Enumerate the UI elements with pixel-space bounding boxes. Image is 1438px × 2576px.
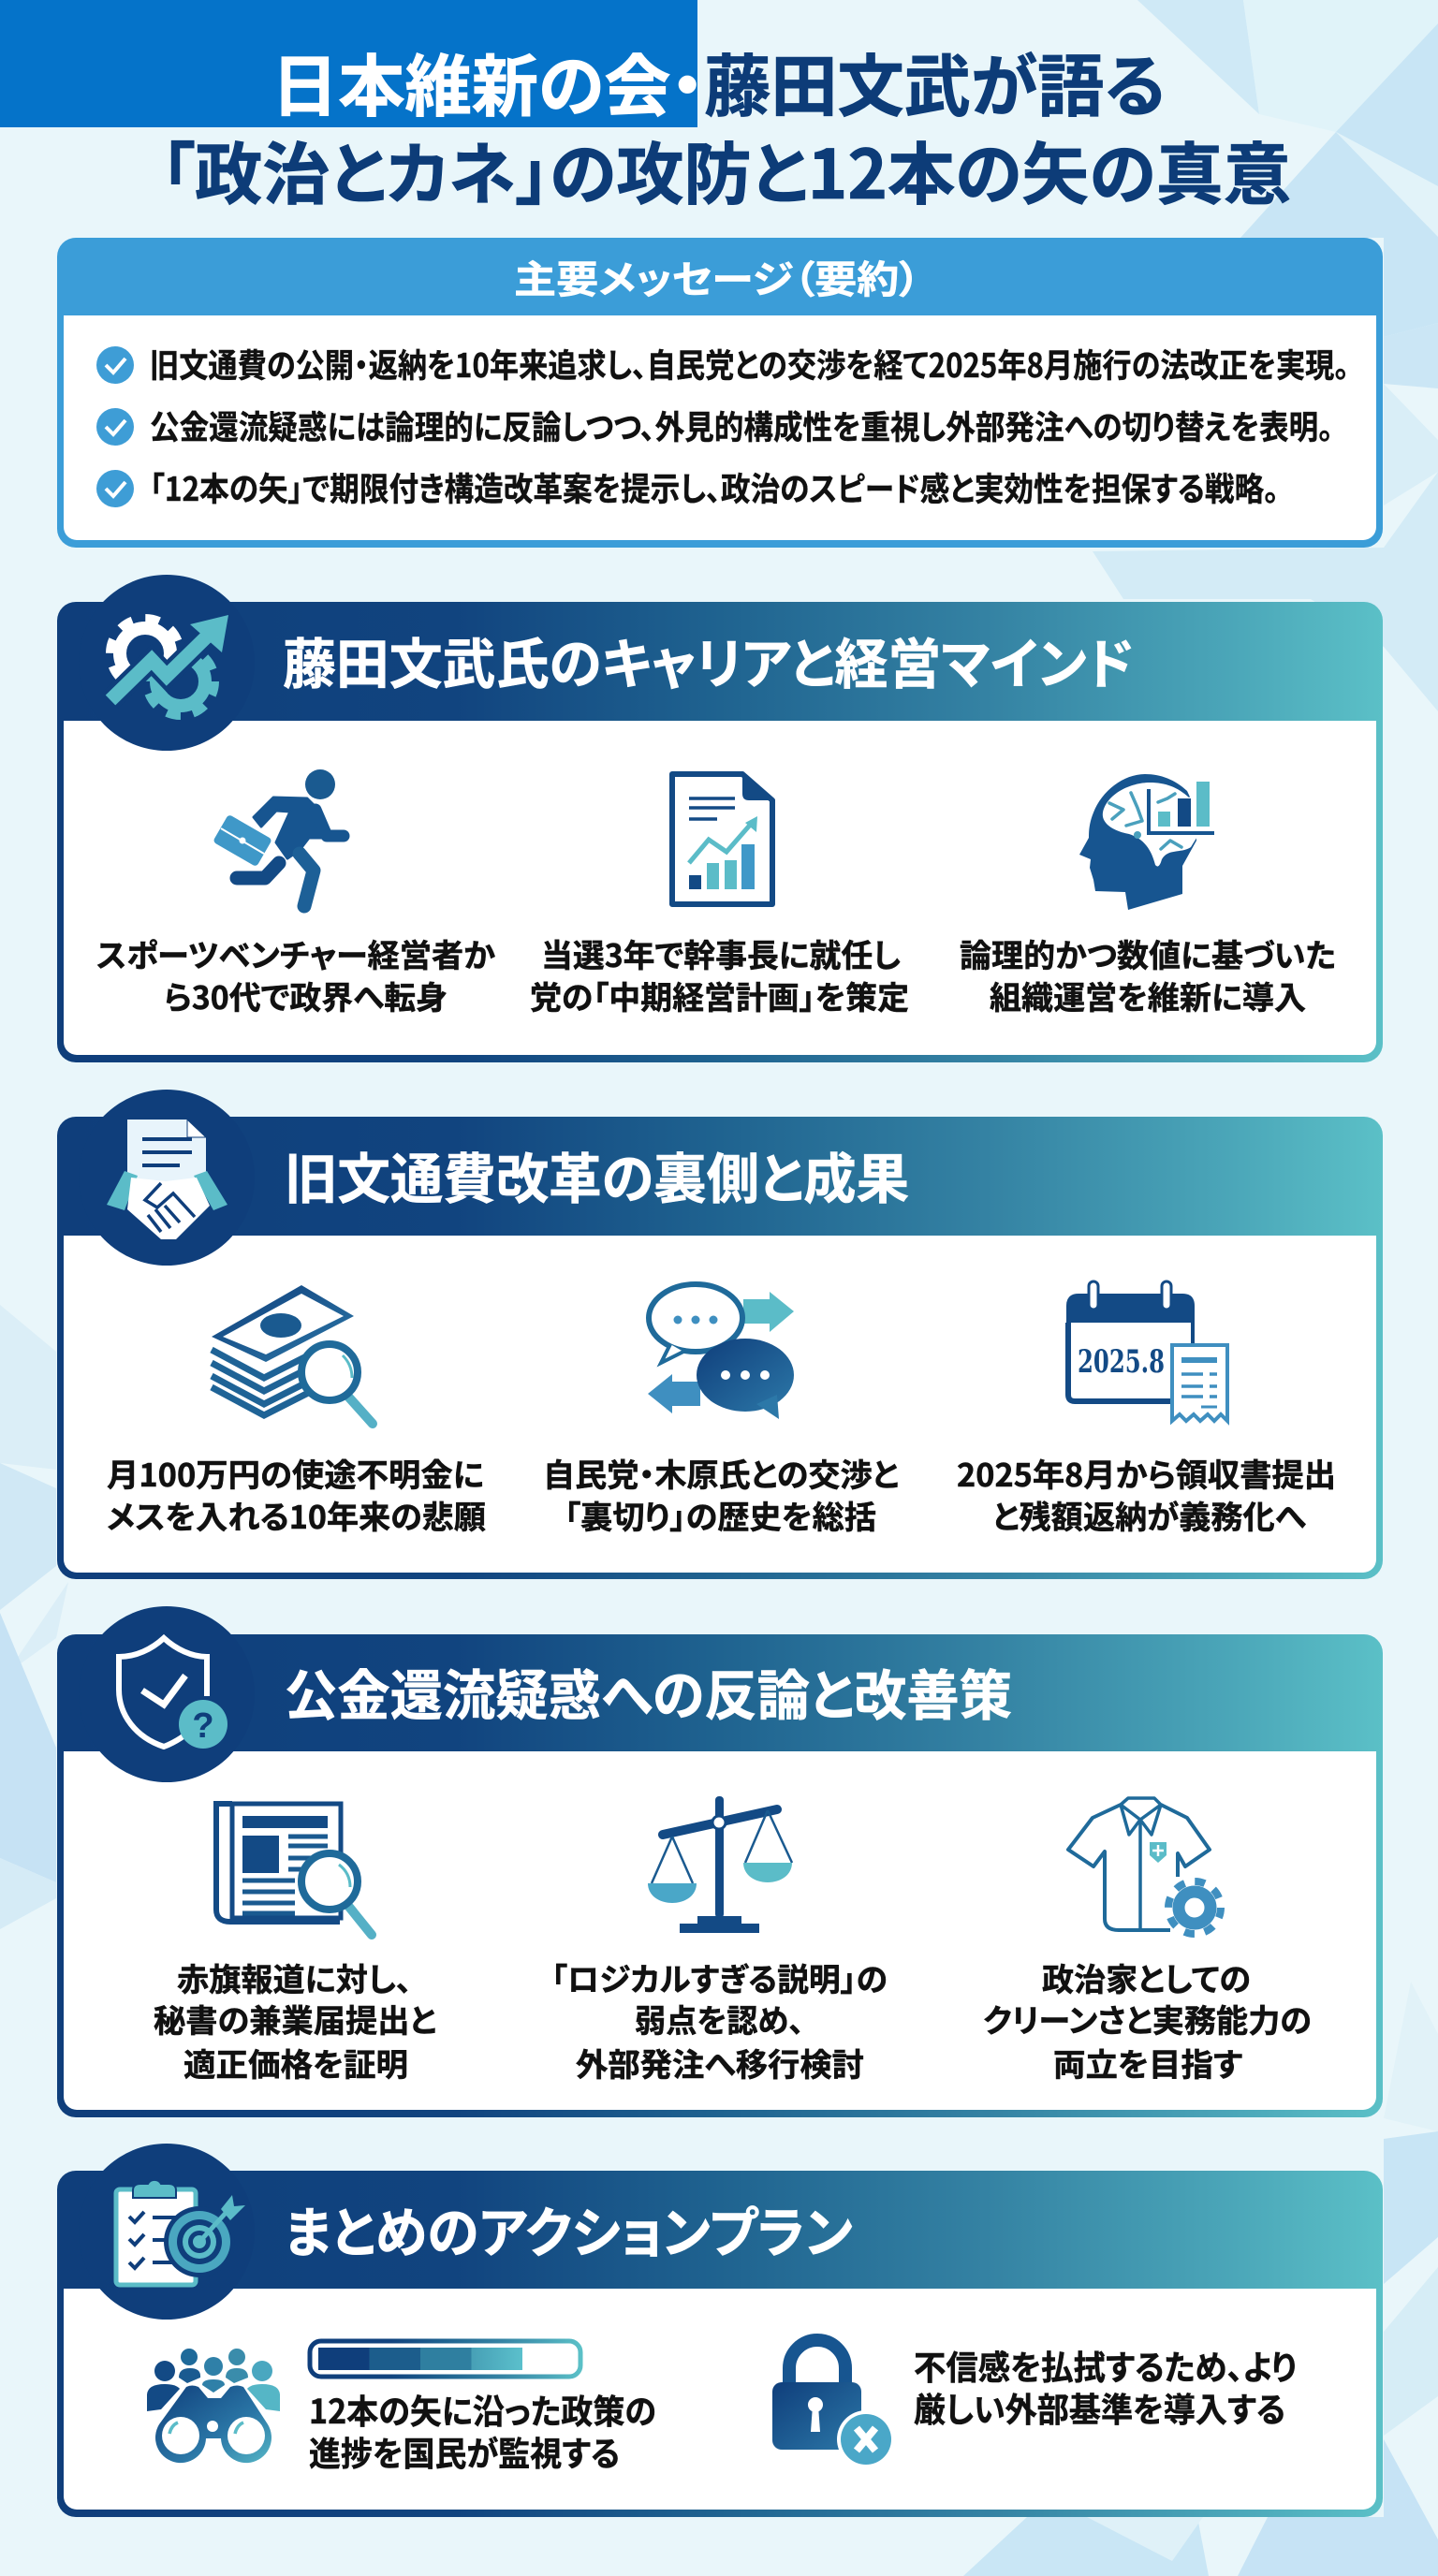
title [161,32,1291,218]
icon: document and handshake [107,1120,227,1239]
text: と残額返納が義務化へ [992,1492,1306,1538]
item: receipt requirement [957,1281,1336,1538]
text: スポーツベンチャー経営者か [96,930,495,976]
text: 組織運営を維新に導入 [990,973,1306,1018]
item: negotiation [543,1284,899,1538]
panel: career and management mindset [57,575,1383,1062]
icon: shield with check and question: ? [192,1706,214,1746]
panel: allowance reform [57,1090,1383,1579]
icon: balance scale [648,1796,792,1933]
panel: action plan [57,2144,1383,2517]
text: 論理的かつ数値に基づいた [960,930,1336,976]
icon: speech bubbles with arrows [648,1284,794,1419]
item: logical explanation [551,1796,888,2086]
progress bar [310,2341,580,2377]
icon: newspaper and magnifier [216,1804,372,1935]
text [543,1450,899,1538]
icon: shield with check and question [119,1638,227,1749]
item: career change [96,769,495,1018]
icon: head with brain and chart [1079,774,1217,910]
text: 秘書の兼業届提出と [154,1996,436,2042]
panel: key messages [57,238,1383,548]
icon: gear and growth arrow [110,615,228,715]
heading: allowance reform: 旧文通費改革の裏側と成果 [285,1135,909,1214]
text: 当選3年で幹事長に就任し [541,930,901,976]
text: クリーンさと実務能力の [983,1996,1312,2042]
title banner block [0,0,697,127]
panel: public money allegations [57,1606,1383,2117]
item: Akahata report [154,1804,436,2086]
text: 両立を目指す [1053,2040,1242,2086]
icon: running businessperson [213,769,344,906]
text [309,2385,656,2476]
text: 12本の矢に沿った政策の [309,2385,656,2434]
text [960,930,1336,1018]
text [96,930,495,1018]
text: 弱点を認め、 [635,1996,804,2042]
item: clean and capable [983,1798,1312,2086]
text: 「裏切り」の歴史を総括 [565,1492,876,1538]
text [154,1954,436,2086]
icon: padlock with x [772,2340,895,2468]
icon: people with binoculars [147,2349,280,2463]
title: 「政治とカネ」の攻防と12本の矢の真意 [161,120,1291,218]
text [530,930,909,1018]
text [551,1954,888,2086]
heading: allegations: 公金還流疑惑への反論と改善策 [285,1652,1012,1731]
icon: calendar and receipt [1066,1281,1227,1421]
text: 赤旗報道に対し、 [177,1954,412,2000]
text: 自民党・木原氏との交渉と [543,1450,899,1496]
text: メスを入れる10年来の悲願 [107,1492,486,1538]
text: 月100万円の使途不明金に [107,1450,484,1496]
title: 日本維新の会・藤田文武が語る [271,32,1166,130]
bullet 2: 公金還流疑惑には論理的に反論しつつ、外見的構成性を重視し外部発注への切り替えを表明。 [150,402,1333,449]
heading: career: 藤田文武氏のキャリアと経営マインド [283,621,1134,699]
text: 不信感を払拭するため、より [914,2341,1297,2390]
item: logical management [960,774,1336,1018]
text: 政治家としての [1042,1954,1251,2000]
item: mid-term plan [530,772,909,1018]
text [983,1954,1312,2086]
heading: key messages: 主要メッセージ（要約） [514,248,920,304]
text: 進捗を国民が監視する [309,2427,620,2476]
item: stricter standards [772,2340,1297,2468]
text [957,1450,1336,1538]
icon: money stack and magnifier [212,1285,373,1424]
icon: report document [672,772,774,904]
item: monitoring [147,2341,656,2476]
text: 外部発注へ移行検討 [576,2040,864,2086]
text: 2025年8月から領収書提出 [957,1450,1336,1496]
icon: clipboard and target [116,2180,245,2285]
text: 厳しい外部基準を導入する [914,2383,1285,2432]
text: 「ロジカルすぎる説明」の [551,1954,888,2000]
text: 適正価格を証明 [183,2040,408,2086]
icon: shirt and gear [1068,1798,1221,1934]
text [914,2341,1297,2432]
date label: 2025.8 [1078,1343,1165,1381]
bullet 3: 「12本の矢」で期限付き構造改革案を提示し、政治のスピード感と実効性を担保する戦略。 [150,463,1279,511]
text: 党の「中期経営計画」を策定 [530,973,909,1018]
item: unexplained money [107,1285,486,1538]
heading: action plan: まとめのアクションプラン [285,2189,853,2268]
text: ら30代で政界へ転身 [164,973,448,1018]
text [107,1450,486,1538]
